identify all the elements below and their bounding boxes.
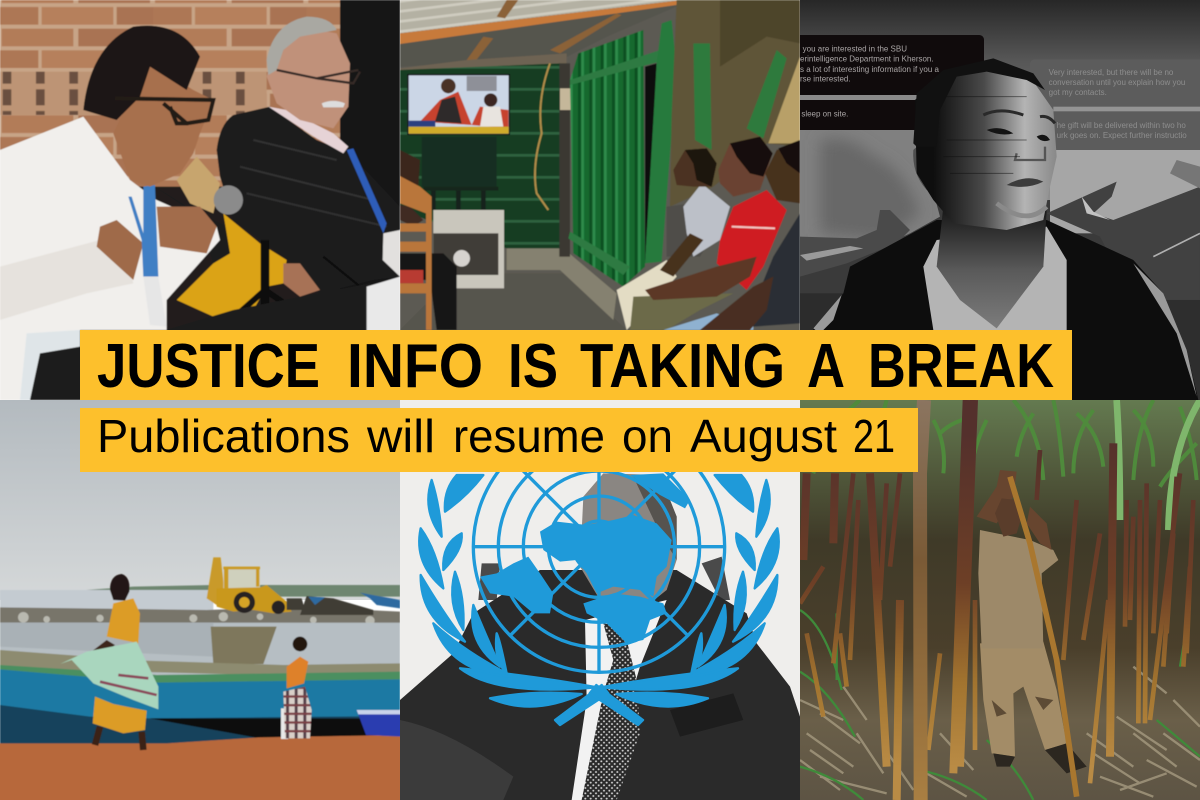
title banner xyxy=(80,330,1072,401)
man right: head xyxy=(267,27,350,128)
viewer 3 xyxy=(663,140,800,330)
chat bubble: grey: got my contacts. xyxy=(1049,88,1107,97)
panel: viewers watching TV in a hut photo xyxy=(400,0,800,330)
tie xyxy=(582,623,640,800)
aircraft right xyxy=(1050,182,1200,234)
panel: conference speakers photo xyxy=(0,0,400,400)
shirt xyxy=(572,600,667,800)
jacket xyxy=(813,220,1198,400)
panel: man in sugar cane field photo xyxy=(800,400,1200,800)
water xyxy=(0,623,400,679)
UN laurel left xyxy=(419,475,608,725)
title banner: BREAK xyxy=(868,332,1054,401)
green wall xyxy=(400,63,563,248)
chat bubble: grey: he gift will be delivered within two ho xyxy=(1057,121,1186,130)
neck xyxy=(937,207,1047,328)
chat bubble: dark: rse interested. xyxy=(800,75,851,84)
panel: lakeside with boat and digger photo xyxy=(0,400,403,800)
chat bubble: dark: s a lot of interesting information if you a xyxy=(800,65,939,74)
equipment box under TV xyxy=(422,137,497,187)
woman in yellow xyxy=(60,574,158,750)
aircraft left xyxy=(800,210,910,277)
green door xyxy=(570,30,645,287)
ear xyxy=(913,146,943,190)
chat bubble: dark xyxy=(793,35,984,130)
title banner: A xyxy=(807,332,845,401)
viewer 2 xyxy=(630,137,787,330)
person on chair xyxy=(400,150,420,187)
shirt xyxy=(923,227,1067,330)
floor xyxy=(400,273,627,400)
ground litter xyxy=(800,667,1200,797)
suit xyxy=(400,570,800,800)
UN continents xyxy=(480,473,690,643)
subtitle banner: resume xyxy=(453,410,605,462)
UN globe rings and meridians xyxy=(473,421,725,672)
pole xyxy=(559,63,570,257)
chat bubble: dark: sleep on site. xyxy=(801,110,848,119)
title banner: INFO xyxy=(347,332,483,401)
UN laurel right xyxy=(590,475,779,725)
title banner: TAKING xyxy=(580,332,785,401)
man left: white shirt xyxy=(0,117,220,400)
head xyxy=(580,473,677,617)
table xyxy=(30,283,370,400)
roof xyxy=(400,0,683,33)
panel: UN emblem over man in suit xyxy=(400,400,800,800)
blue basin xyxy=(357,710,403,737)
chat bubble: dark: you are interested in the SBU xyxy=(803,44,907,53)
carton xyxy=(433,210,504,288)
girl xyxy=(281,637,312,739)
TV xyxy=(407,74,510,135)
viewer 1 xyxy=(617,148,730,330)
chat bubble: dark: erintelligence Department in Kherson. xyxy=(800,55,934,64)
title banner: IS xyxy=(508,332,558,401)
brick wall xyxy=(0,0,343,187)
digger xyxy=(207,557,292,614)
man left: head xyxy=(113,63,213,187)
subtitle banner: Publications xyxy=(97,410,350,462)
subtitle banner: August xyxy=(690,410,837,462)
blonde hair xyxy=(177,157,220,213)
subtitle banner: 21 xyxy=(853,410,895,462)
hair xyxy=(913,58,1045,147)
chair xyxy=(478,557,730,600)
title banner: JUSTICE xyxy=(97,332,320,401)
large foreground stalk xyxy=(920,400,924,800)
cable xyxy=(535,63,550,210)
subtitle banner: will xyxy=(366,410,435,462)
microphone xyxy=(233,205,317,253)
man left: hands xyxy=(157,207,217,253)
rock causeway xyxy=(0,607,400,624)
misty trees xyxy=(800,130,940,238)
thick cane stalks xyxy=(803,400,1113,800)
eyes, nose, mouth xyxy=(983,111,1055,123)
man left: lanyard and badge xyxy=(128,185,158,277)
farmer xyxy=(977,470,1087,773)
chat bubble: grey xyxy=(1044,69,1200,150)
cane leaves xyxy=(813,400,1197,487)
boat xyxy=(0,650,400,718)
sky right xyxy=(1050,150,1200,233)
chat bubble: grey: conversation until you explain how you xyxy=(1049,78,1185,87)
man right: shirt and lanyard xyxy=(268,107,348,153)
door post xyxy=(645,20,677,263)
face xyxy=(915,63,1057,230)
chat bubble: grey: urk goes on. Expect further instructio xyxy=(1057,131,1187,140)
thin cane stalks xyxy=(800,450,1193,783)
cane held by farmer xyxy=(1010,477,1077,797)
shallow water xyxy=(0,700,400,750)
subtitle banner xyxy=(80,408,918,472)
sand xyxy=(0,735,403,800)
chat bubble: grey: Very interested, but there will be no xyxy=(1049,68,1174,77)
man right: jacket xyxy=(216,106,386,284)
far shore xyxy=(63,585,400,597)
tree xyxy=(670,0,800,207)
subtitle banner: on xyxy=(622,410,673,462)
yellow garment xyxy=(177,213,287,317)
dark clothing between speakers xyxy=(160,190,233,263)
panel: grayscale portrait over chat messages xyxy=(793,0,1200,400)
wooden chair xyxy=(400,176,432,330)
